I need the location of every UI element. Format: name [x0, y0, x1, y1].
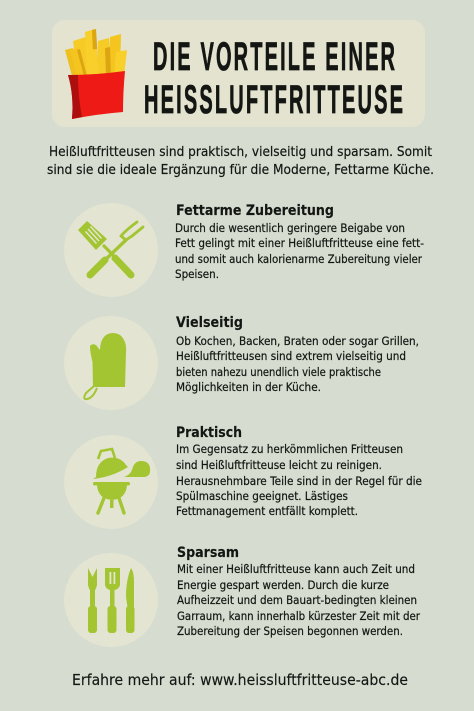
section: Praktisch	[176, 424, 422, 518]
section: Sparsam	[177, 544, 420, 638]
icon: spatula and fork	[64, 203, 158, 297]
section: Praktisch: Praktisch	[176, 424, 242, 441]
section: Praktisch: Herausnehmbare Teile sind in der Regel für die	[176, 474, 422, 488]
section: Sparsam: Garraum, kann innerhalb kürzester Zeit mit der	[177, 609, 420, 623]
section: Sparsam: Energie gespart werden. Durch die kurze	[177, 578, 389, 592]
section: Fettarme Zubereitung: Fettarme Zubereitung	[176, 202, 334, 219]
icon: oven mitt	[64, 316, 158, 410]
section: Vielseitig	[176, 314, 419, 394]
section: Vielseitig: Vielseitig	[176, 314, 243, 331]
section: Sparsam: Sparsam	[177, 544, 239, 561]
title: HEISSLUFTFRITTEUSE	[144, 76, 403, 122]
section: Sparsam: Mit einer Heißluftfritteuse kann auch Zeit und	[177, 562, 415, 576]
section: Fettarme Zubereitung	[175, 202, 424, 281]
section: Praktisch: Fettmanagement entfällt komplett.	[176, 504, 358, 518]
section: Sparsam: Aufheizzeit und dem Bauart-bedingten kleinen	[177, 593, 417, 607]
section: Vielseitig: Heißluftfritteusen sind extrem vielseitig und	[176, 349, 406, 363]
section: Vielseitig: Ob Kochen, Backen, Braten oder sogar Grillen,	[176, 334, 419, 348]
section: Sparsam: Zubereitung der Speisen begonnen werden.	[177, 624, 403, 638]
footer link: Erfahre mehr auf: www.heissluftfritteuse-abc.de	[72, 671, 408, 689]
title: DIE VORTEILE EINER	[153, 33, 395, 79]
section: Fettarme Zubereitung: Speisen.	[175, 267, 219, 281]
section: Praktisch: sind Heißluftfritteuse leicht zu reinigen.	[176, 458, 382, 472]
section: Vielseitig: bieten nahezu unendlich viele praktische	[176, 365, 381, 379]
section: Fettarme Zubereitung: Fett gelingt mit einer Heißluftfritteuse eine fett-	[175, 236, 424, 250]
title	[144, 33, 403, 122]
header panel	[52, 20, 425, 127]
intro text	[47, 145, 434, 178]
intro text: Heißluftfritteusen sind praktisch, vielseitig und sparsam. Somit	[49, 145, 432, 160]
section: Fettarme Zubereitung: und somit auch kalorienarme Zubereitung vieler	[175, 252, 422, 266]
section: Praktisch: Im Gegensatz zu herkömmlichen Fritteusen	[176, 442, 403, 456]
icon: barbecue grill	[64, 435, 158, 529]
section: Vielseitig: Möglichkeiten in der Küche.	[176, 380, 321, 394]
intro text: sind sie die ideale Ergänzung für die Moderne, Fettarme Küche.	[47, 163, 434, 178]
icon: cutlery	[64, 553, 158, 647]
section: Praktisch: Spülmaschine geeignet. Lästiges	[176, 489, 348, 503]
icon: french fries	[65, 29, 127, 119]
section: Fettarme Zubereitung: Durch die wesentlich geringere Beigabe von	[175, 221, 405, 235]
